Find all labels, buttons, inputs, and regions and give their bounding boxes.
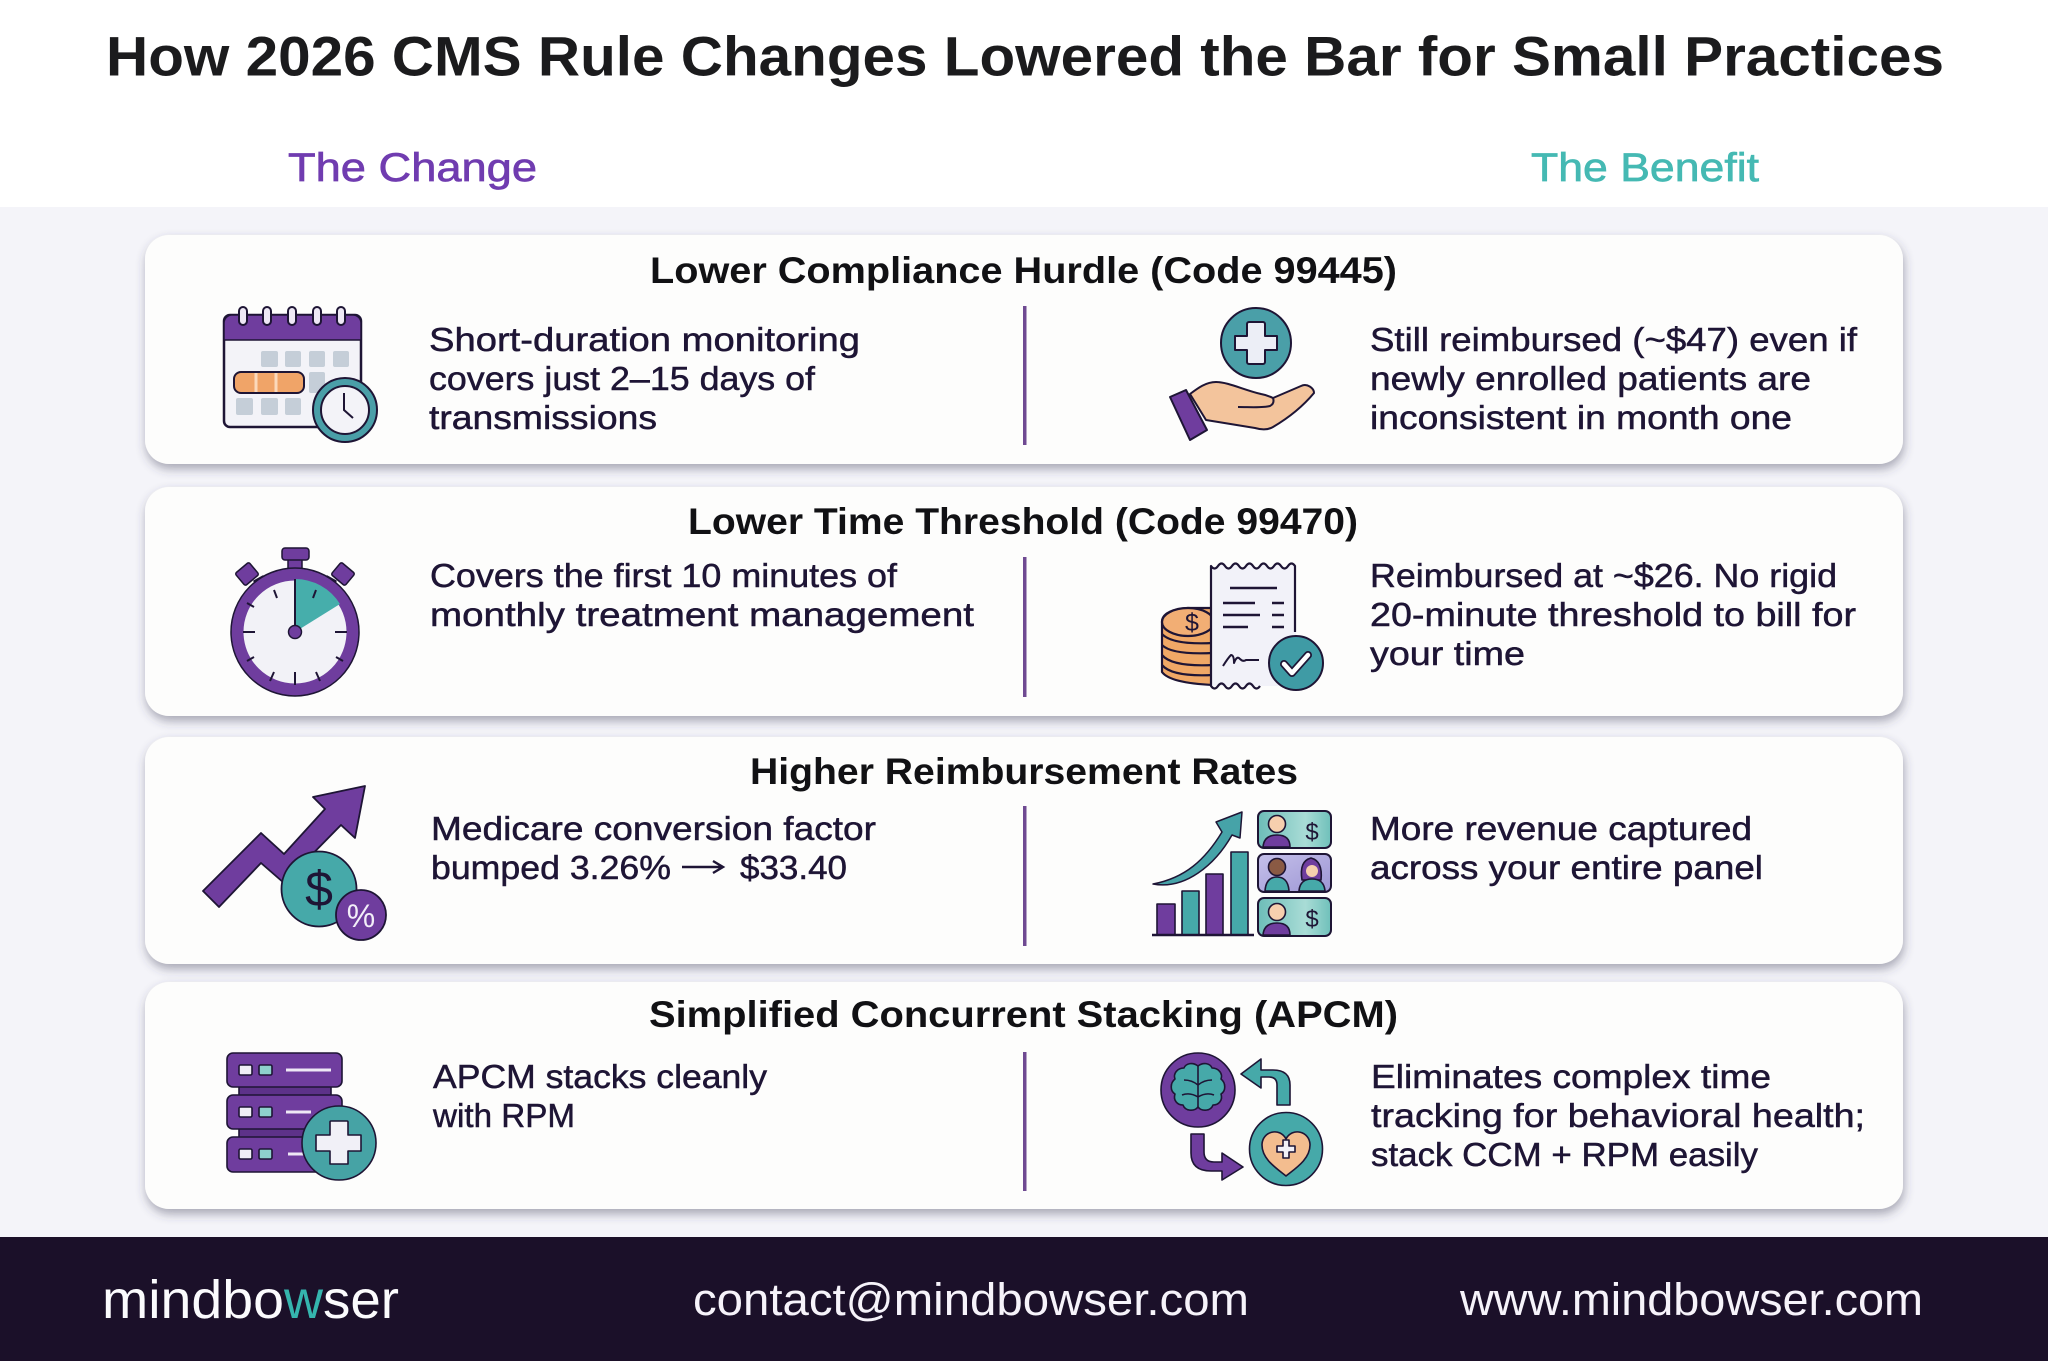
change text: monthly treatment management [430,597,975,634]
panel: lower compliance hurdle [145,235,1903,464]
contact email: contact@mindbowser.com [693,1274,1249,1325]
change text: APCM stacks cleanly [433,1059,767,1096]
benefit text [1370,811,1763,887]
icon: rising arrow with coins: $ [305,861,333,917]
change text: Medicare conversion factor [431,811,876,848]
change text: Short-duration monitoring [429,322,860,359]
website: www.mindbowser.com [1459,1274,1923,1325]
icon: growth chart and patient panels: $ [1305,819,1319,846]
footer bar [0,1237,2048,1361]
benefit text: stack CCM + RPM easily [1371,1137,1758,1174]
change text [429,322,860,437]
logo: mindbowser: mindbo [102,1270,284,1330]
benefit text [1371,1059,1865,1174]
benefit text: inconsistent in month one [1370,400,1792,437]
benefit text: Still reimbursed (~$47) even if [1370,322,1858,359]
change text: $33.40 [740,850,847,887]
icon: receipt, coins and check: $ [1185,609,1199,637]
benefit text: Eliminates complex time [1371,1059,1771,1096]
icon: stopwatch [231,548,359,696]
icon: growth chart and patient panels: $ [1305,906,1319,933]
card background [145,235,1903,464]
change text: bumped 3.26% [431,850,671,887]
change text: Covers the first 10 minutes of [430,558,898,595]
change text [432,1059,767,1135]
icon: brain and heart cycle [1161,1053,1322,1186]
card heading: Lower Compliance Hurdle (Code 99445) [650,250,1397,291]
title: How 2026 CMS Rule Changes Lowered the Bar for Small Practices [106,24,1944,88]
icon: server with medical cross [227,1053,376,1180]
card heading: Lower Time Threshold (Code 99470) [688,501,1358,542]
panel: simplified concurrent stacking [145,982,1903,1209]
change text: with RPM [432,1098,575,1135]
benefit text: 20-minute threshold to bill for [1370,597,1856,634]
change text: covers just 2–15 days of [429,361,816,398]
card background [145,487,1903,716]
benefit text: across your entire panel [1370,850,1763,887]
benefit text: Reimbursed at ~$26. No rigid [1370,558,1837,595]
logo: mindbowser: w [283,1270,324,1330]
icon: rising arrow with coins: % [347,898,375,934]
benefit text: More revenue captured [1370,811,1752,848]
logo: mindbowser: ser [323,1270,399,1330]
change text [430,558,975,634]
column heading: the benefit: The Benefit [1531,146,1759,190]
benefit text [1370,558,1856,673]
benefit text: tracking for behavioral health; [1371,1098,1865,1135]
panel: higher reimbursement rates [145,737,1903,964]
benefit text: your time [1370,636,1525,673]
column heading: the change: The Change [288,146,537,190]
change text [431,811,876,887]
icon: calendar with clock [224,307,377,442]
panel: lower time threshold [145,487,1903,716]
benefit text: newly enrolled patients are [1370,361,1811,398]
icon: growth chart and patient panels [1152,811,1331,936]
card heading: Simplified Concurrent Stacking (APCM) [649,994,1398,1035]
card heading: Higher Reimbursement Rates [750,751,1298,792]
icon: hand with medical cross [1170,308,1314,440]
icon: receipt, coins and check [1162,564,1323,690]
change text: transmissions [429,400,657,437]
benefit text [1370,322,1858,437]
icon: rising arrow with coins [203,786,386,940]
card background [145,737,1903,964]
card background [145,982,1903,1209]
